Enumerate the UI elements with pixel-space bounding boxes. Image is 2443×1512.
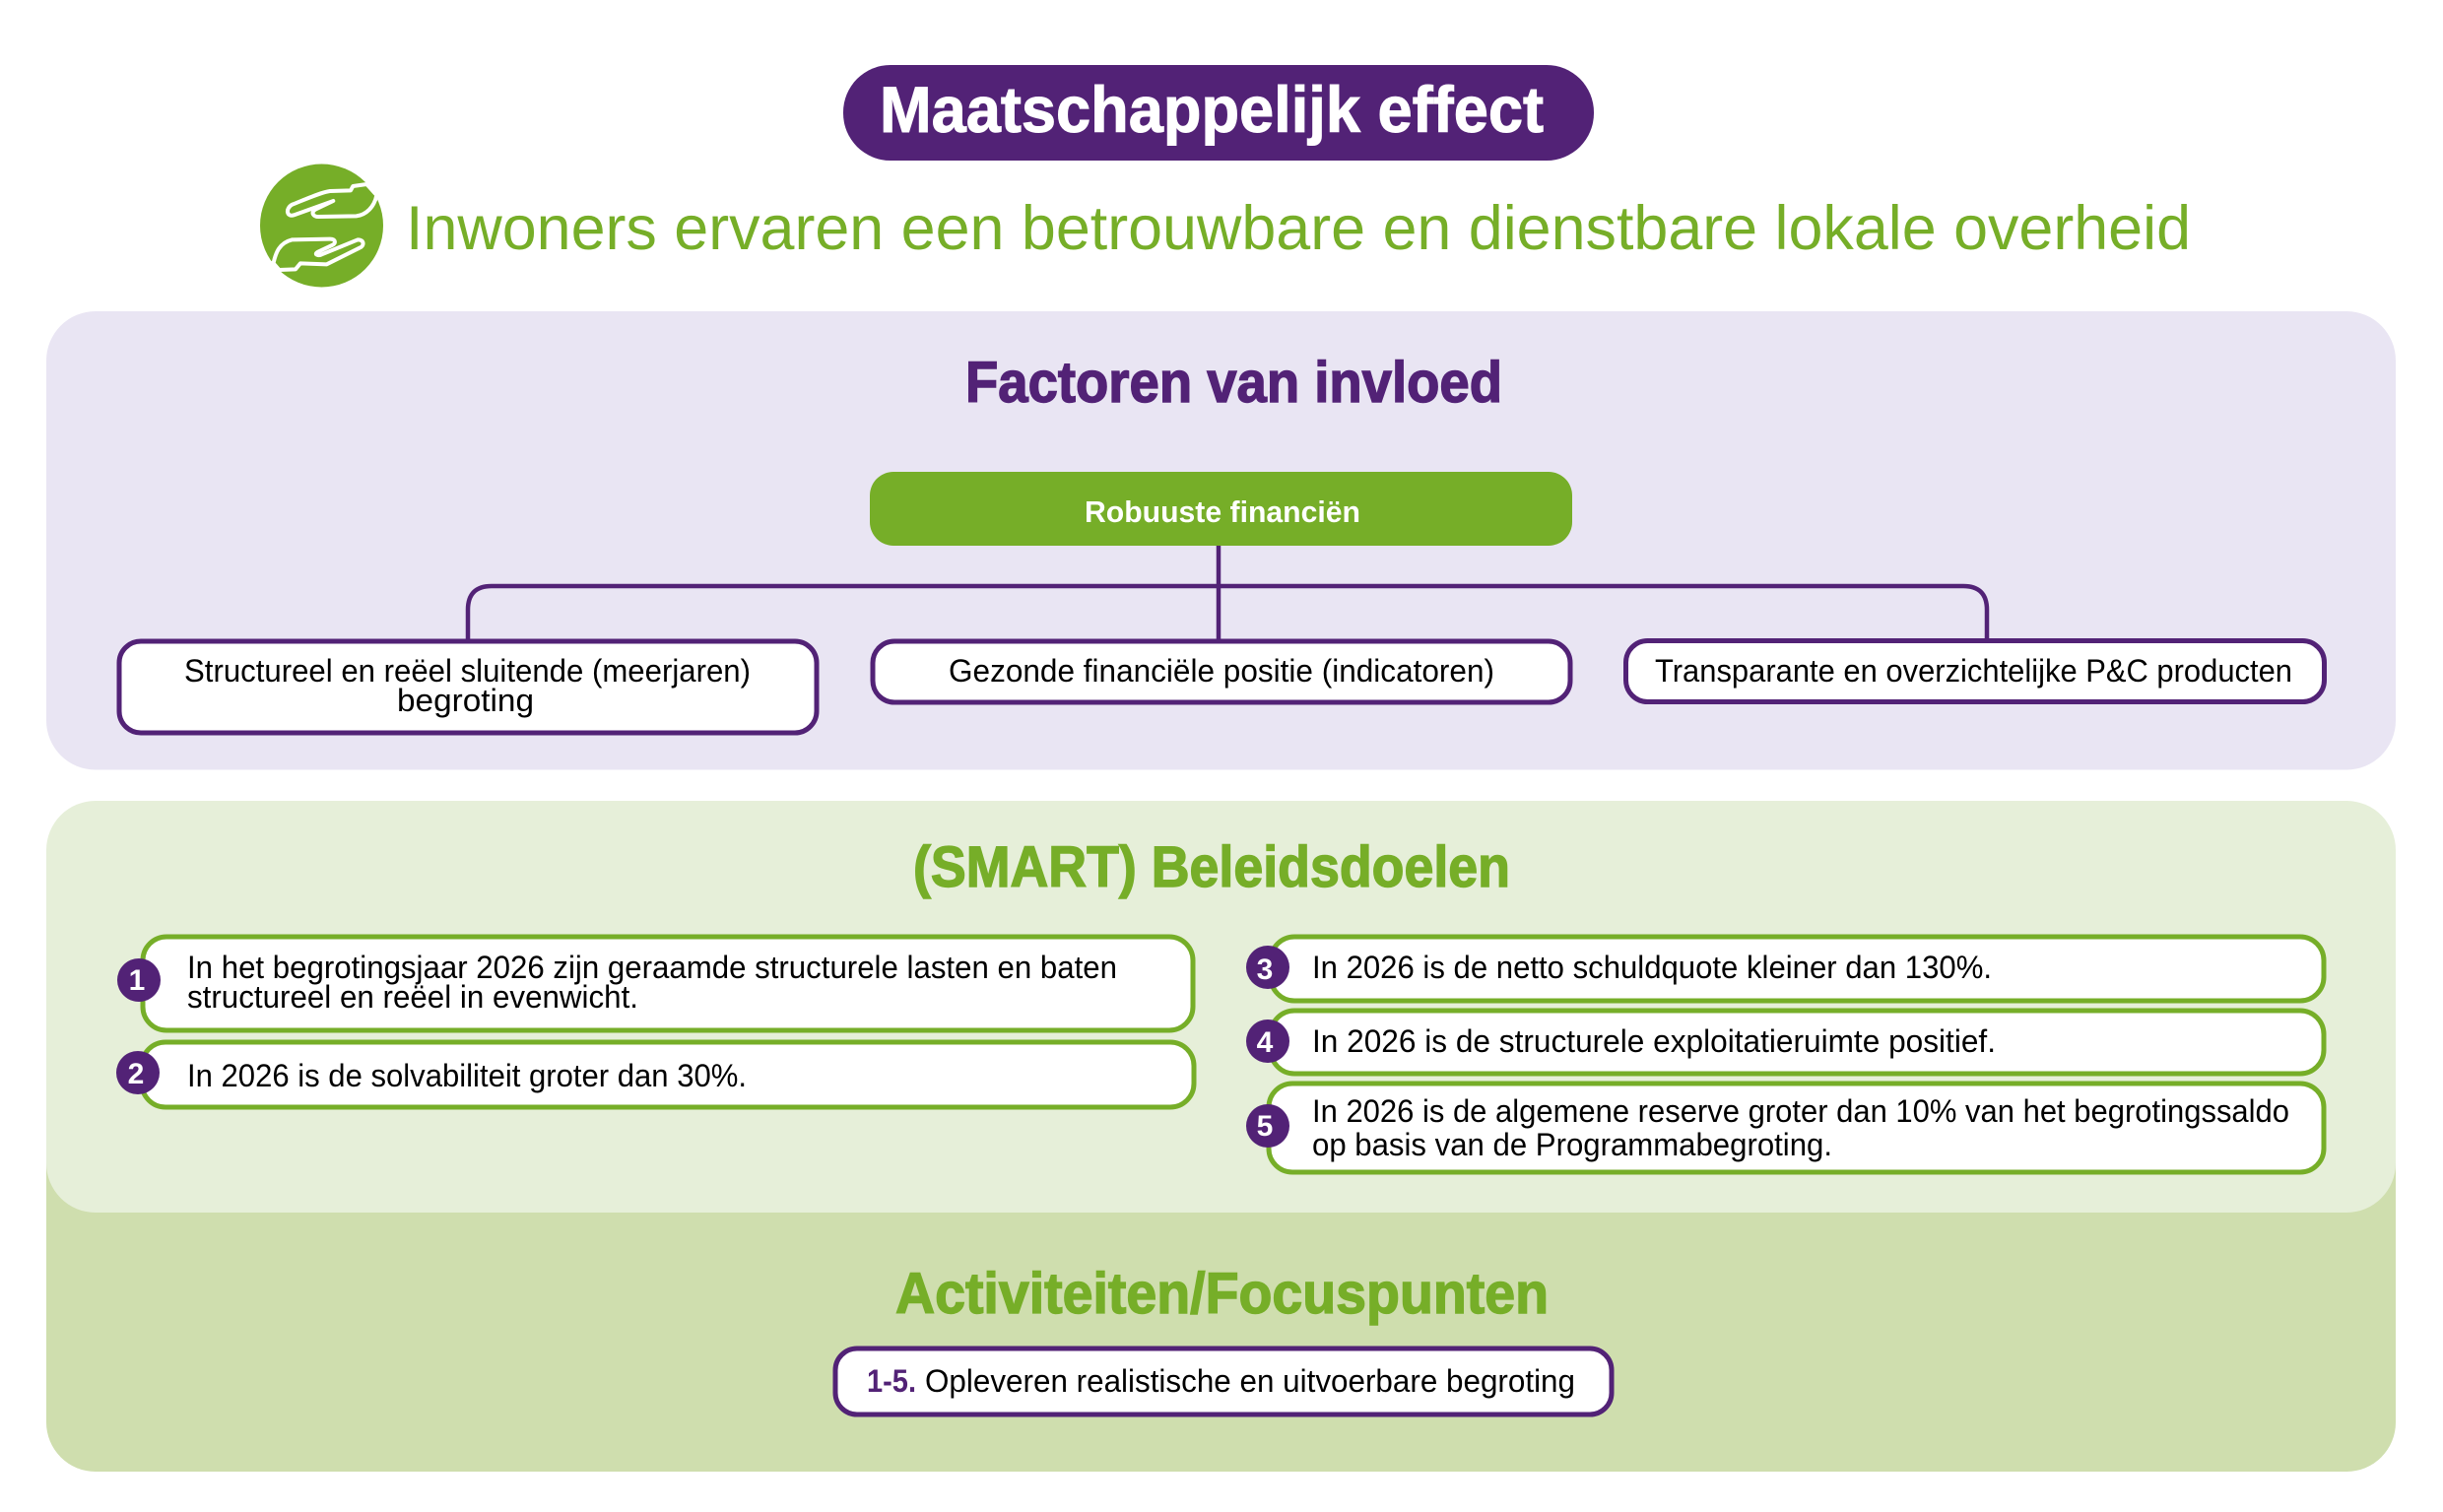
- goal 2: 2: [128, 1058, 144, 1090]
- goal 5: In 2026 is de algemene reserve groter dan 10% van het begrotingssaldo: [1312, 1093, 2289, 1129]
- panel: Activiteiten background: [46, 1084, 2396, 1472]
- box: P&C producten: Transparante en overzichtelijke P&C producten: [1655, 653, 2292, 689]
- goal 5: 5: [1257, 1110, 1273, 1143]
- goal 1: 1: [129, 964, 145, 997]
- box: meerjarenbegroting: [119, 641, 817, 733]
- box: activiteit 1-5: Opleveren realistische en uitvoerbare begroting: [925, 1363, 1575, 1399]
- heading: Factoren van invloed: Factoren van invloed: [965, 351, 1502, 415]
- goal 1: structureel en reëel in evenwicht.: [187, 979, 638, 1015]
- connector lines: [468, 546, 1987, 641]
- title pill: Maatschappelijk effect: [880, 73, 1544, 146]
- box: financiele positie: [873, 641, 1570, 702]
- heading: Activiteiten/Focuspunten: Activiteiten/Focuspunten: [895, 1262, 1549, 1326]
- goal 4: In 2026 is de structurele exploitatieruimte positief.: [1312, 1023, 1996, 1059]
- goal 3: [1246, 937, 2324, 1001]
- heading: SMART Beleidsdoelen: (SMART) Beleidsdoelen: [913, 835, 1510, 899]
- goal 2: In 2026 is de solvabiliteit groter dan 30%.: [187, 1058, 747, 1093]
- box: Robuuste financien: [870, 472, 1572, 546]
- goal 3: 3: [1257, 953, 1273, 986]
- box: Robuuste financien: Robuuste financiën: [1085, 494, 1360, 529]
- box: activiteit 1-5: [835, 1348, 1612, 1414]
- box: P&C producten: [1625, 640, 2325, 701]
- goal 5: op basis van de Programmabegroting.: [1312, 1127, 1832, 1162]
- panel: Beleidsdoelen: [46, 801, 2396, 1213]
- box: meerjarenbegroting: begroting: [397, 683, 534, 718]
- goal 5: [1246, 1084, 2324, 1172]
- goal 4: 4: [1257, 1026, 1274, 1059]
- panel: Factoren van invloed: [46, 311, 2396, 770]
- goal 1: [117, 937, 1193, 1030]
- icon: caring hands: [260, 164, 383, 288]
- box: meerjarenbegroting: Structureel en reëel sluitende (meerjaren): [184, 653, 751, 689]
- goal 2: [116, 1042, 1194, 1107]
- box: financiele positie: Gezonde financiële positie (indicatoren): [949, 653, 1494, 689]
- goal 1: In het begrotingsjaar 2026 zijn geraamde structurele lasten en baten: [187, 950, 1117, 985]
- subtitle: Inwoners ervaren een betrouwbare en dienstbare lokale overheid: [406, 194, 2191, 263]
- box: activiteit 1-5: 1-5.: [867, 1363, 916, 1399]
- goal 3: In 2026 is de netto schuldquote kleiner dan 130%.: [1312, 950, 1992, 985]
- goal 4: [1246, 1011, 2324, 1074]
